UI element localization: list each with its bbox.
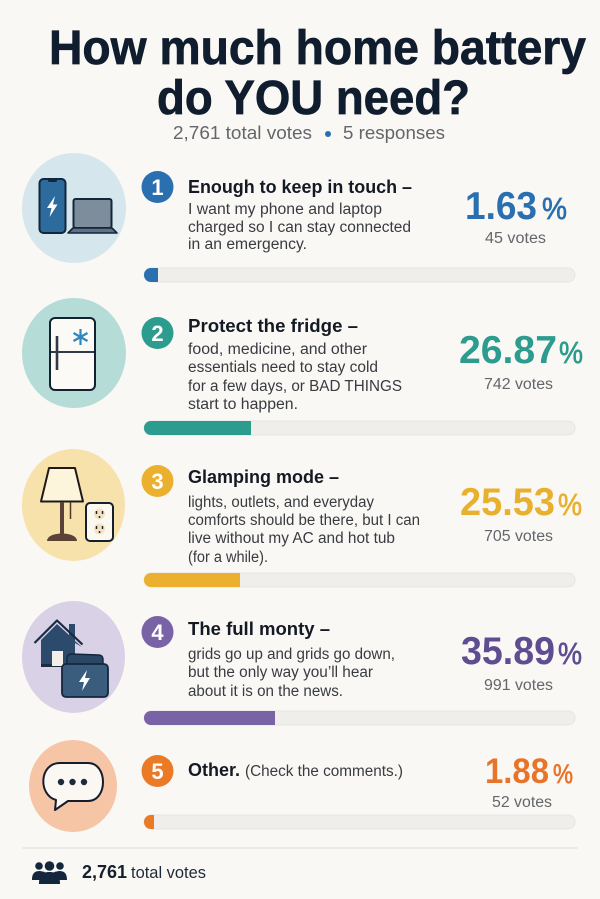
- option 5 text: (Check the comments.): [245, 763, 403, 780]
- option 3 progress bar: [144, 573, 575, 587]
- option 5 percentage: 1.88: [485, 752, 549, 791]
- panel: option 1: [22, 153, 575, 282]
- option 1 progress bar: [144, 268, 575, 282]
- option 1 heading: Enough to keep in touch –: [188, 177, 412, 197]
- number badge 5: [142, 755, 174, 787]
- option 4 votes: 991 votes: [484, 677, 553, 694]
- option 2 percentage: 26.87: [459, 329, 557, 372]
- panel: option 2: [22, 298, 583, 435]
- number badge 5: 5: [151, 759, 164, 784]
- panel: option 3: [22, 449, 582, 587]
- icon: lamp and outlet: [22, 449, 125, 561]
- title: do YOU need?: [157, 72, 470, 125]
- option 3 description: live without my AC and hot tub: [188, 530, 395, 547]
- option 5 votes: 52 votes: [492, 794, 552, 811]
- option 5 progress bar: [144, 815, 575, 829]
- option 3 description: (for a while).: [188, 549, 268, 566]
- option 1 description: [188, 201, 411, 253]
- option 3 description: comforts should be there, but I can: [188, 512, 420, 529]
- subtitle: [173, 123, 445, 143]
- option 2 description: [188, 341, 402, 413]
- option 4 percentage: %: [558, 636, 582, 671]
- subtitle: 5 responses: [343, 123, 445, 143]
- option 3 percentage: %: [558, 487, 582, 522]
- option 2 percentage: %: [559, 335, 583, 370]
- panel: option 5: [29, 740, 575, 832]
- option 3 votes: 705 votes: [484, 528, 553, 545]
- option 4 description: about it is on the news.: [188, 683, 343, 700]
- number badge 4: [142, 616, 174, 648]
- number badge 1: [142, 171, 174, 203]
- title: [49, 22, 586, 125]
- option 2 description: for a few days, or BAD THINGS: [188, 378, 402, 395]
- option 2 progress bar: [144, 421, 575, 435]
- option 1 description: I want my phone and laptop: [188, 201, 382, 218]
- number badge 3: [142, 465, 174, 497]
- number badge 2: [142, 317, 174, 349]
- option 4 description: grids go up and grids go down,: [188, 646, 395, 663]
- number badge 1: 1: [151, 175, 164, 200]
- option 2 description: food, medicine, and other: [188, 341, 367, 358]
- footer total votes: 2,761: [82, 862, 127, 882]
- option 5 text: Other.: [188, 760, 240, 780]
- option 2 votes: 742 votes: [484, 376, 553, 393]
- footer total votes: total votes: [131, 864, 206, 882]
- option 4 heading: The full monty –: [188, 619, 330, 639]
- footer total votes: [82, 862, 206, 882]
- option 1 votes: 45 votes: [485, 230, 546, 247]
- icon: speech bubble: [29, 740, 117, 832]
- option 1 percentage: %: [542, 191, 567, 226]
- subtitle: 2,761 total votes: [173, 123, 312, 143]
- option 2 heading: Protect the fridge –: [188, 316, 358, 336]
- icon: fridge: [22, 298, 126, 408]
- option 5 text: [188, 760, 403, 780]
- option 3 description: lights, outlets, and everyday: [188, 494, 374, 511]
- option 3 heading: Glamping mode –: [188, 467, 339, 487]
- option 1 description: charged so I can stay connected: [188, 219, 411, 236]
- icon: people: [32, 861, 67, 884]
- title: How much home battery: [49, 22, 586, 75]
- option 2 description: start to happen.: [188, 396, 298, 413]
- option 3 description: [188, 494, 420, 566]
- option 3 percentage: 25.53: [460, 481, 555, 524]
- option 4 description: [188, 646, 395, 700]
- panel: option 4: [22, 601, 582, 725]
- icon: phone and laptop: [22, 153, 126, 263]
- option 4 percentage: 35.89: [461, 630, 555, 673]
- option 4 description: but the only way you’ll hear: [188, 664, 373, 681]
- option 5 percentage: %: [553, 759, 573, 789]
- number badge 3: 3: [151, 469, 164, 494]
- option 2 description: essentials need to stay cold: [188, 359, 378, 376]
- number badge 4: 4: [151, 620, 164, 645]
- number badge 2: 2: [151, 321, 164, 346]
- option 1 percentage: 1.63: [465, 185, 537, 228]
- icon: house and battery: [22, 601, 125, 713]
- option 1 description: in an emergency.: [188, 236, 307, 253]
- option 4 progress bar: [144, 711, 575, 725]
